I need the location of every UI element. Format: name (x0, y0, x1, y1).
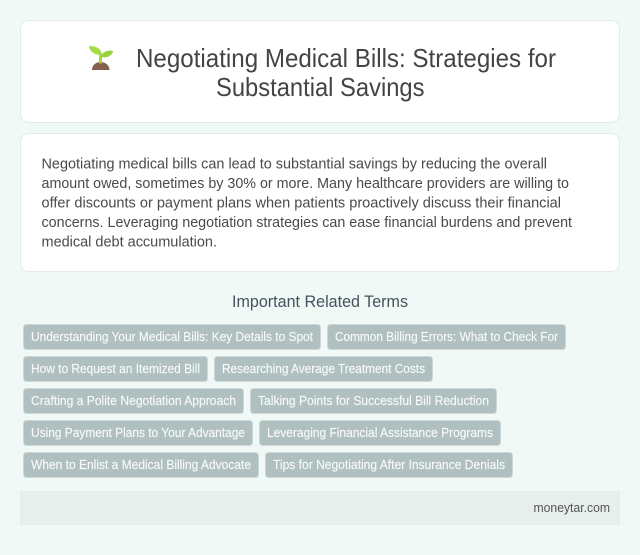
tag (24, 324, 320, 350)
summary paragraph: offer discounts or payment plans when patients proactively discuss their financial (42, 194, 561, 212)
footer source text: moneytar.com (534, 500, 610, 515)
footer (20, 491, 620, 525)
summary paragraph: amount owed, sometimes by 30% or more. Many healthcare providers are willing to (42, 175, 569, 192)
tag (266, 452, 512, 478)
tag: Crafting a Polite Negotiation Approach (31, 393, 236, 408)
tag: Talking Points for Successful Bill Reduction (258, 393, 489, 408)
heading: important related terms: Important Related Terms (232, 292, 408, 311)
tag: Understanding Your Medical Bills: Key Details to Spot (31, 329, 313, 344)
tag (24, 452, 258, 478)
panel: title card (20, 20, 620, 122)
tag (250, 388, 496, 414)
tag (24, 356, 208, 382)
tag (24, 388, 244, 414)
title (136, 45, 556, 102)
tag: Leveraging Financial Assistance Programs (267, 425, 493, 440)
tag: Common Billing Errors: What to Check For (335, 329, 559, 344)
tag: Using Payment Plans to Your Advantage (31, 425, 245, 440)
tag (24, 420, 252, 446)
summary paragraph: concerns. Leveraging negotiation strategies can ease financial burdens and prevent (42, 214, 573, 231)
icon: sprout (89, 46, 113, 70)
tag: Researching Average Treatment Costs (222, 361, 425, 376)
tag: Tips for Negotiating After Insurance Denials (273, 457, 505, 472)
panel: summary card (20, 134, 620, 272)
related terms tags (24, 324, 566, 478)
tag (260, 420, 500, 446)
summary paragraph: medical debt accumulation. (42, 234, 217, 250)
summary paragraph: Negotiating medical bills can lead to substantial savings by reducing the overall (42, 156, 547, 172)
summary paragraph (42, 156, 573, 250)
tag (328, 324, 566, 350)
tag (214, 356, 432, 382)
tag: How to Request an Itemized Bill (31, 361, 200, 376)
title: Negotiating Medical Bills: Strategies for (136, 45, 556, 73)
tag: When to Enlist a Medical Billing Advocate (31, 457, 251, 472)
title: Substantial Savings (216, 74, 424, 102)
